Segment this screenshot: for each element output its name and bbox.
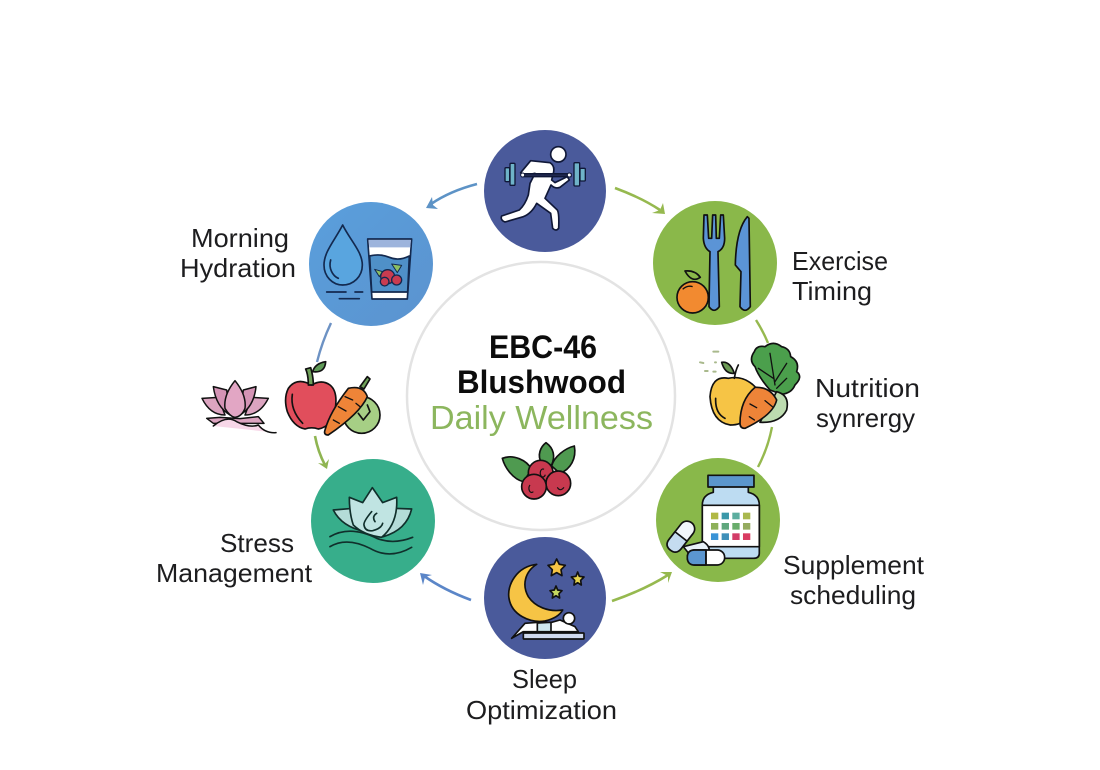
apple [710, 378, 755, 425]
panel: center circle [407, 262, 675, 530]
arrow: nutrition to stress [315, 436, 329, 469]
label: Nutrition synrergy: Nutrition [815, 373, 920, 403]
icon: sleep circle [484, 537, 606, 659]
specks [700, 352, 718, 372]
arrow: exercise to hydration [426, 184, 477, 209]
label: Morning Hydration [180, 223, 296, 283]
label: Nutrition synrergy: synrergy [816, 403, 915, 433]
label: Morning Hydration: Hydration [180, 253, 296, 283]
icon: supplement circle [656, 458, 780, 582]
label: Stress Management: Stress [220, 528, 294, 558]
icon: pink lotus [202, 381, 276, 433]
capsules [683, 542, 709, 555]
icon: stress circle [311, 459, 435, 583]
label: Exercise Timing [792, 246, 888, 306]
label: Exercise Timing: Exercise [792, 246, 888, 276]
label: Exercise Timing: Timing [792, 276, 872, 306]
knife [735, 217, 750, 310]
orange [677, 282, 708, 313]
pill chart [711, 513, 750, 540]
arrow: sleep to stress [420, 573, 471, 600]
sleeping person [512, 620, 578, 638]
arrow: nutrition connector [756, 320, 772, 467]
arrow: sleep to supplement [612, 572, 672, 601]
label: Nutrition synrergy [815, 373, 920, 433]
label: Sleep Optimization [466, 664, 617, 725]
icon: exercise circle [484, 130, 606, 252]
arrow: hydration connector [317, 323, 331, 362]
icon: meal circle [653, 201, 777, 325]
label: Supplement scheduling [783, 550, 925, 610]
label: Sleep Optimization: Optimization [466, 695, 617, 725]
label: Supplement scheduling: Supplement [783, 550, 925, 580]
label: Stress Management: Management [156, 558, 313, 588]
arrow: exercise to nutrition [615, 188, 665, 214]
subtitle: Daily Wellness: Daily Wellness [430, 399, 653, 436]
icon: blushwood berries [502, 443, 575, 499]
label: Supplement scheduling: scheduling [790, 580, 916, 610]
lettuce [751, 343, 800, 394]
runner figure [501, 147, 569, 230]
label: Stress Management [156, 528, 313, 588]
icon: hydration circle [309, 202, 433, 326]
fork [703, 215, 725, 310]
stars [548, 559, 565, 576]
label: Sleep Optimization: Sleep [512, 664, 577, 694]
carrot [740, 387, 777, 428]
title: EBC-46 Blushwood [457, 329, 626, 400]
icon: nutrition vegetables [700, 343, 800, 428]
label: Morning Hydration: Morning [191, 223, 289, 253]
bottle [702, 487, 759, 558]
icon: apple and vegetables [286, 362, 380, 435]
crescent moon [509, 564, 563, 621]
title: EBC-46 Blushwood: Blushwood [457, 364, 626, 400]
water drop [324, 225, 362, 285]
title: EBC-46 Blushwood: EBC-46 [489, 329, 597, 365]
barbell [505, 163, 585, 186]
glass with berries [368, 239, 412, 299]
